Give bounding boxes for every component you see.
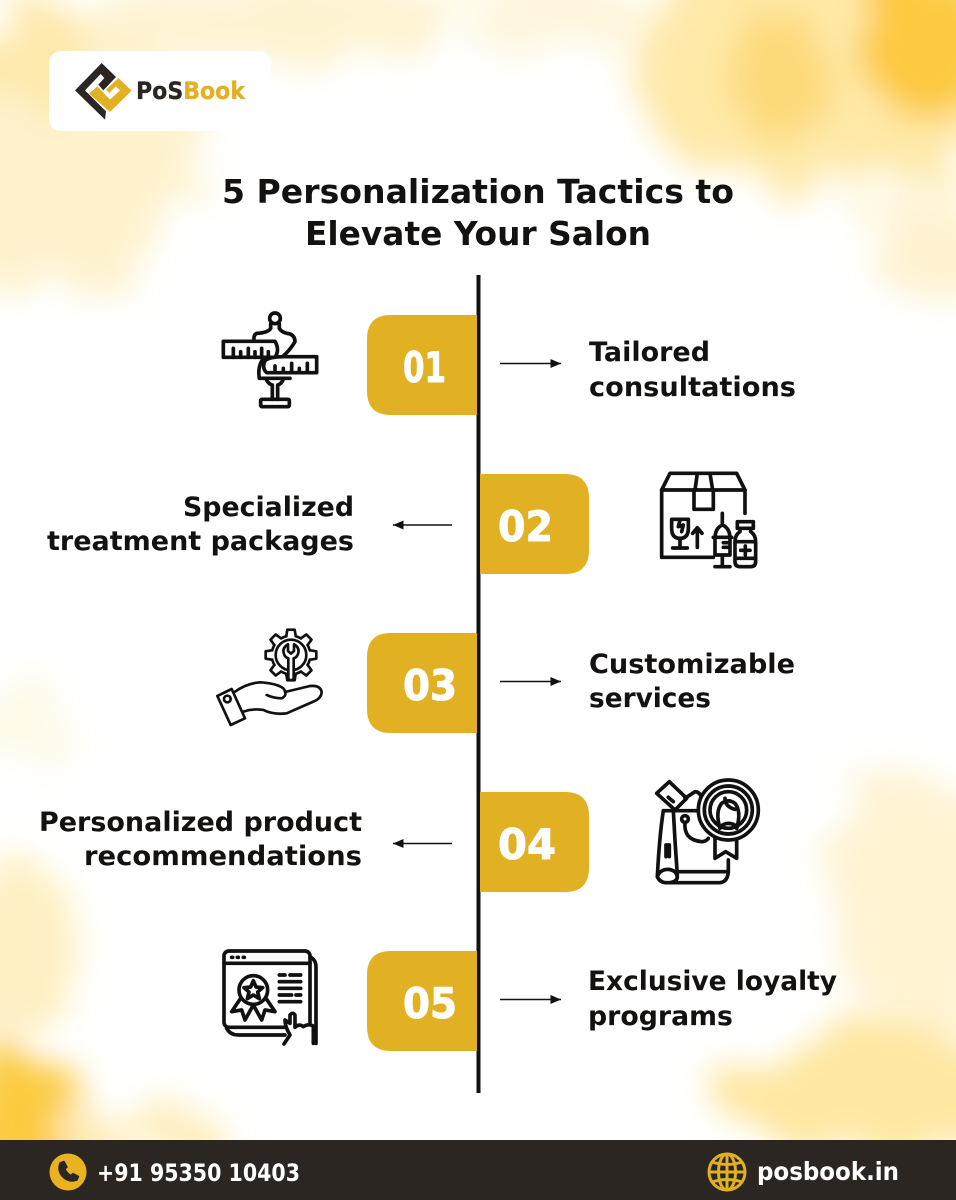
label 03: Customizable <box>589 649 795 680</box>
arrow 02 <box>393 524 452 526</box>
website: posbook.in <box>757 1157 899 1186</box>
icon: hand holding gear and wrench <box>217 630 322 725</box>
label 05: programs <box>588 1001 733 1032</box>
label 01: consultations <box>589 372 796 403</box>
icon: globe <box>709 1154 745 1190</box>
arrow 04 <box>393 842 452 844</box>
label 02 <box>47 492 354 557</box>
number 01: 01 <box>403 343 446 392</box>
label 05 <box>588 966 837 1032</box>
badge 01 <box>367 315 477 415</box>
label 04: Personalized product <box>39 807 362 838</box>
icon: mannequin with measuring tapes <box>223 313 317 407</box>
arrow 01 <box>500 362 561 364</box>
number 03: 03 <box>403 661 457 710</box>
label 04: recommendations <box>84 841 362 872</box>
step 01 <box>223 313 796 415</box>
logo card <box>49 51 271 131</box>
icon: shopping bag with customer medal <box>657 780 758 883</box>
step 05 <box>224 951 837 1051</box>
badge 05 <box>367 951 477 1051</box>
icon: loyalty certificate window with pointer <box>224 951 316 1044</box>
arrow 05 <box>500 998 561 1000</box>
badge 03 <box>367 633 477 733</box>
badge 04 <box>480 792 589 892</box>
label 02: treatment packages <box>47 526 354 557</box>
number 02: 02 <box>498 502 553 551</box>
logo wordmark: PoSBook <box>136 77 246 105</box>
phone number: +91 95350 10403 <box>97 1159 300 1187</box>
badge 02 <box>480 474 589 574</box>
arrow 03 <box>500 680 561 682</box>
label 01 <box>589 337 796 403</box>
label 04 <box>39 807 362 872</box>
title: 5 Personalization Tactics to <box>222 172 734 211</box>
label 01: Tailored <box>589 337 710 368</box>
title: Elevate Your Salon <box>305 214 651 253</box>
step 04 <box>39 780 758 892</box>
footer bar <box>0 1140 956 1200</box>
icon: package with syringe and vial <box>662 473 756 567</box>
step 02 <box>47 473 756 574</box>
label 03: services <box>589 683 711 714</box>
timeline spine <box>476 275 480 1093</box>
label 05: Exclusive loyalty <box>588 966 837 997</box>
label 03 <box>589 649 795 714</box>
step 03 <box>217 630 795 733</box>
number 04: 04 <box>498 820 556 869</box>
title <box>222 172 734 253</box>
label 02: Specialized <box>183 492 354 523</box>
icon: phone <box>50 1154 86 1190</box>
number 05: 05 <box>403 979 457 1028</box>
logo mark <box>75 63 132 120</box>
